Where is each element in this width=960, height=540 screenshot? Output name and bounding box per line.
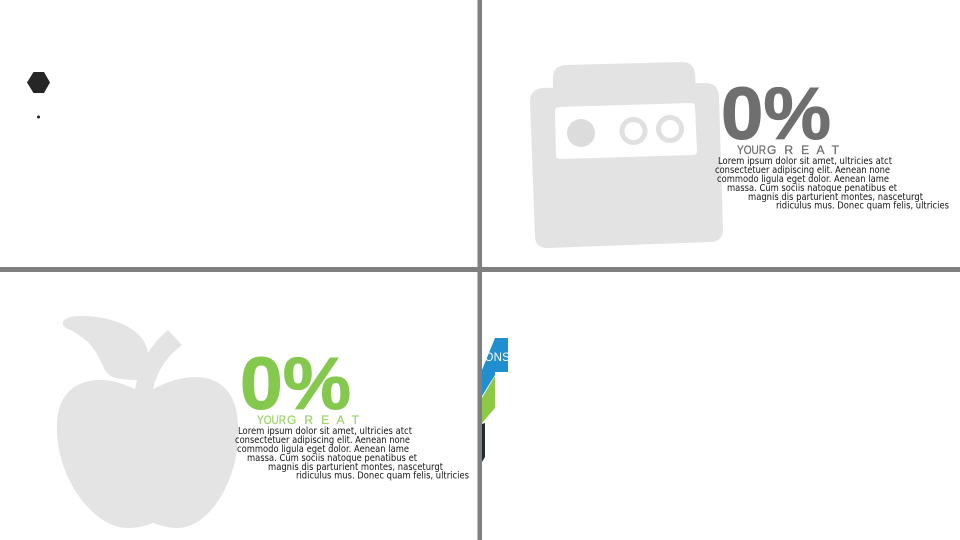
body text: Lorem ipsum dolor sit amet, ultricies atct — [238, 426, 412, 437]
subheading: YOUR — [737, 143, 766, 157]
subheading: G R E A T — [767, 143, 840, 157]
ribbon fragment at centre — [482, 338, 510, 462]
panel: top right wallet statistic — [530, 62, 949, 248]
subheading: YOUR — [257, 413, 286, 427]
dark ribbon — [482, 423, 485, 462]
body text: commodo ligula eget dolor. Aenean lame — [717, 174, 889, 185]
panel: bottom left apple statistic — [57, 316, 469, 528]
body text: consectetuer adipiscing elit. Aenean none — [235, 435, 410, 446]
ribbon label: ONS — [484, 352, 510, 364]
body text: magnis dis parturient montes, nasceturgt — [268, 462, 443, 473]
percentage value: 0% — [721, 72, 831, 155]
body text: massa. Cum sociis natoque penatibus et — [727, 183, 897, 194]
body text — [235, 426, 469, 482]
body text: ridiculus mus. Donec quam felis, ultricies — [296, 470, 469, 482]
blue ribbon — [482, 338, 508, 396]
icon: hexagon — [27, 72, 50, 93]
body text — [715, 156, 949, 212]
body text: massa. Cum sociis natoque penatibus et — [247, 453, 417, 464]
subheading: G R E A T — [287, 413, 360, 427]
icon: apple — [57, 316, 238, 528]
small dot — [37, 116, 40, 118]
green ribbon — [482, 376, 495, 423]
body text: Lorem ipsum dolor sit amet, ultricies atct — [718, 156, 892, 167]
percentage value: 0% — [240, 342, 351, 425]
body text: magnis dis parturient montes, nasceturgt — [748, 192, 923, 203]
body text: consectetuer adipiscing elit. Aenean none — [715, 165, 890, 176]
body text: commodo ligula eget dolor. Aenean lame — [237, 444, 409, 455]
panel: top left — [27, 72, 50, 118]
icon: wallet — [530, 62, 723, 248]
